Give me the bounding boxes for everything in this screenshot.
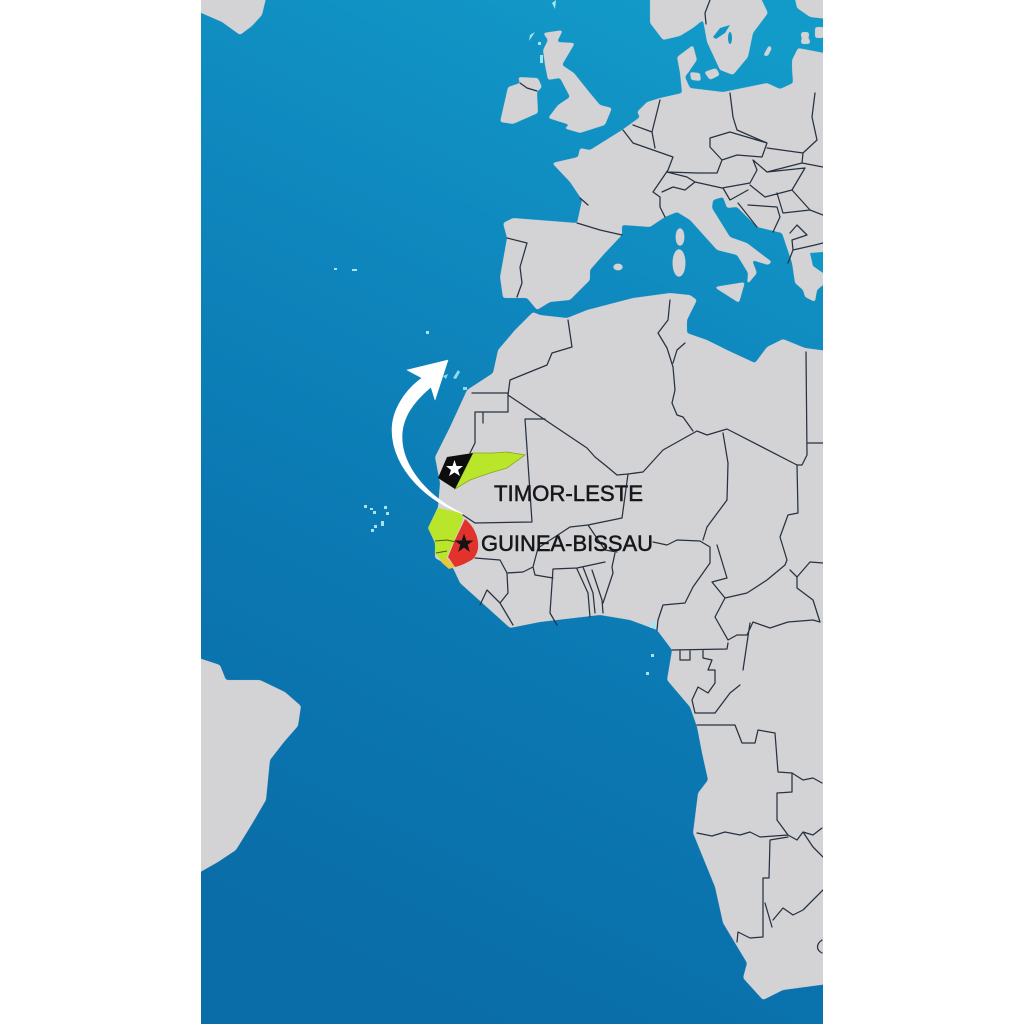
borders: Europe — [507, 0, 823, 297]
ocean background — [201, 0, 823, 1024]
arrow: white curved arrow — [392, 360, 463, 514]
land: Scandinavia — [650, 0, 768, 75]
land: Denmark islands — [690, 68, 720, 81]
internal line on green region — [435, 540, 456, 553]
islands: Cape Verde — [364, 505, 389, 532]
land: Sicily — [716, 282, 744, 302]
borders: Central Africa — [653, 433, 823, 713]
land: Greenland corner — [201, 0, 266, 34]
land: Sardinia — [672, 249, 686, 277]
borders: North Africa — [470, 300, 823, 475]
land: Finland — [793, 0, 835, 20]
borders: West Africa — [463, 419, 628, 625]
land: Corsica — [676, 228, 684, 246]
highlighted country: yellow Guinea-Bissau strip — [441, 557, 455, 569]
islands: Canary — [443, 370, 467, 390]
islands: mid-Atlantic specks — [334, 268, 429, 334]
label: Guinea-Bissau: GUINEA-BISSAU — [481, 531, 653, 556]
land: Africa — [428, 293, 835, 1000]
sea: Aegean — [810, 252, 823, 273]
islands: Gulf of Guinea — [646, 622, 656, 675]
land: Balearic island — [613, 264, 623, 270]
land masses — [190, 0, 835, 1000]
icon: black star — [454, 534, 474, 552]
small islands — [334, 0, 656, 675]
lake: Vanern — [713, 25, 730, 39]
highlighted country: red flag band — [448, 519, 478, 567]
land: South America — [190, 655, 301, 878]
icon: white star — [446, 460, 463, 476]
land: continental Europe — [500, 45, 835, 310]
lake: Vattern — [728, 32, 732, 44]
lakes and inland seas — [713, 25, 823, 273]
land: Ireland — [500, 77, 542, 124]
highlighted country: green Timor-Leste shape — [455, 452, 525, 489]
borders: Southern Africa — [697, 725, 823, 953]
highlighted country: black flag triangle — [438, 453, 473, 489]
highlighted country: green Guinea-Bissau shape — [428, 508, 463, 563]
country borders — [463, 0, 823, 953]
land: Gotland and Baltic islands — [763, 27, 824, 56]
map infographic — [201, 0, 823, 1024]
islands: Hebrides — [529, 0, 556, 63]
label: Timor-Leste: TIMOR-LESTE — [494, 481, 643, 506]
land: Great Britain — [543, 30, 612, 133]
